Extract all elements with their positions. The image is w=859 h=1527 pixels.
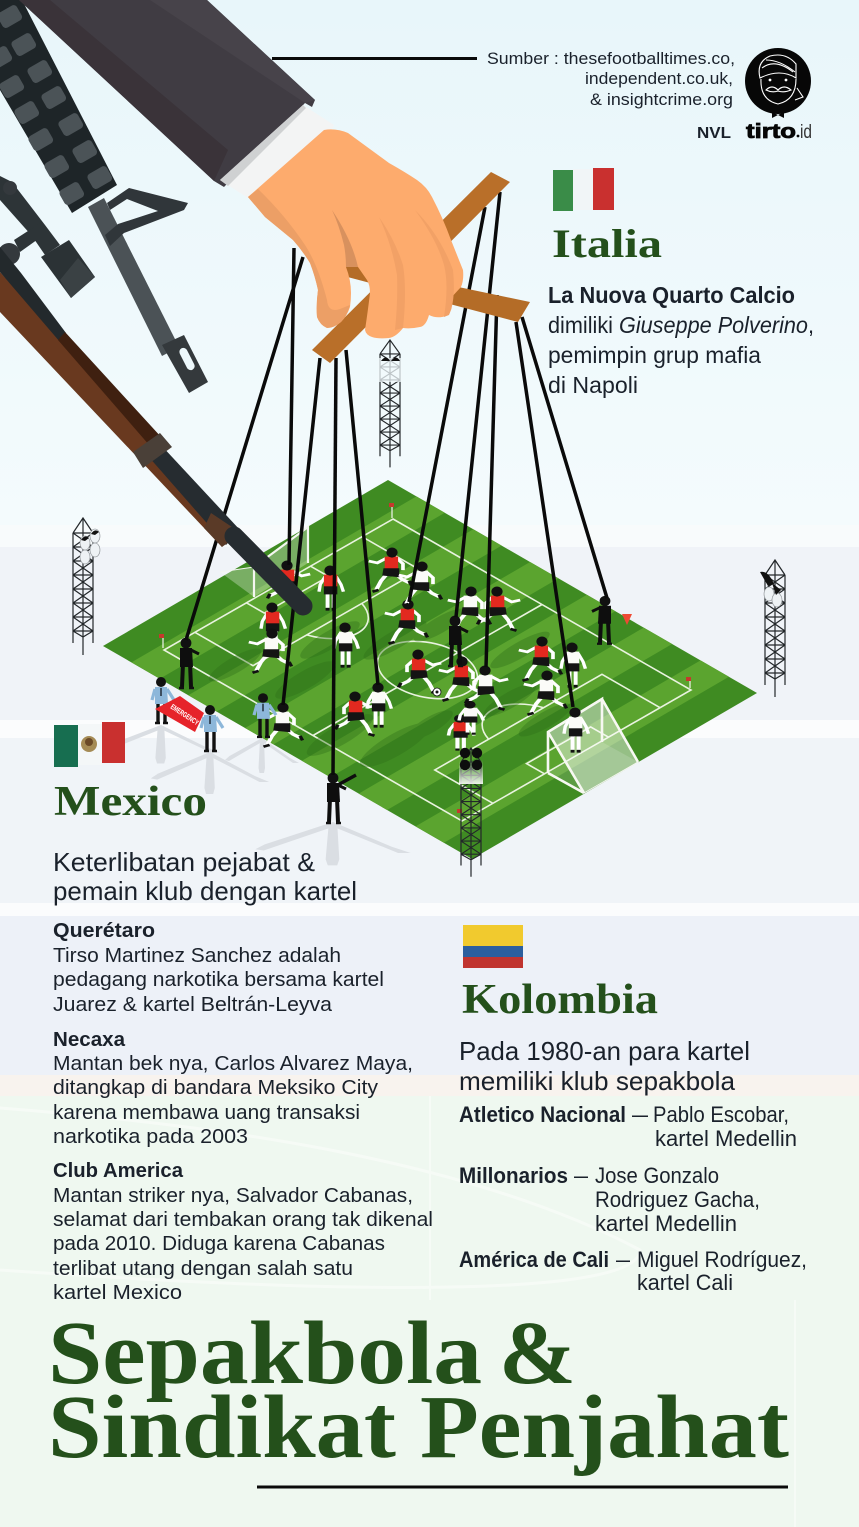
- sideline figure shadows: [102, 725, 411, 865]
- text: Necaxa: [53, 1028, 413, 1148]
- source credits: & insightcrime.org: [590, 91, 733, 109]
- text: Millonarios: kartel Medellin: [595, 1211, 737, 1236]
- text: Millonarios: Millonarios: [459, 1163, 568, 1188]
- text: Club America: Mantan striker nya, Salvador Cabanas,: [53, 1184, 413, 1207]
- stadium light towers: [73, 340, 785, 697]
- title: Sepakbola: [48, 1304, 482, 1403]
- subheading: Mexico: Keterlibatan pejabat &: [53, 847, 315, 877]
- text: Millonarios: —: [574, 1163, 588, 1188]
- heading: Kolombia: Kolombia: [462, 977, 658, 1023]
- flag: Mexico: [54, 722, 125, 767]
- tower: left: [73, 518, 100, 655]
- logo: tirto mascot: [745, 48, 811, 118]
- flag: Italia: [553, 168, 614, 211]
- black-suited referees and officials: [179, 596, 612, 823]
- subheading: Kolombia: Pada 1980-an para kartel: [459, 1036, 750, 1066]
- text: Club America: pada 2010. Diduga karena Cabanas: [53, 1232, 385, 1255]
- subheading: Kolombia: memiliki klub sepakbola: [459, 1066, 736, 1096]
- source rule: [272, 57, 477, 60]
- text: Millonarios: Jose Gonzalo: [595, 1163, 719, 1188]
- text: Querétaro: Tirso Martinez Sanchez adalah: [53, 944, 341, 967]
- lower goal: [548, 699, 638, 793]
- medics with stretcher: [152, 677, 276, 751]
- puppet control bars: [312, 172, 530, 363]
- text: Club America: Club America: [53, 1159, 184, 1182]
- text: Club America: selamat dari tembakan orang tak dikenal: [53, 1208, 433, 1231]
- heading: Mexico: Mexico: [54, 779, 207, 825]
- text: Millonarios: Rodriguez Gacha,: [595, 1187, 760, 1212]
- front light tower: [459, 748, 483, 877]
- text: América de Cali: América de Cali: [459, 1247, 609, 1272]
- text: Necaxa: narkotika pada 2003: [53, 1125, 248, 1148]
- text: Querétaro: Juarez & kartel Beltrán-Leyva: [53, 993, 333, 1016]
- pitch stripes: [103, 480, 757, 859]
- pitch markings: [164, 519, 691, 821]
- heading: Italia: Italia: [552, 221, 662, 266]
- text: Querétaro: [53, 919, 384, 1016]
- tower: right: [760, 560, 785, 697]
- puppet strings: [186, 192, 607, 775]
- flag: Kolombia: [463, 925, 523, 968]
- text: Club America: [53, 1159, 433, 1304]
- subheading: Kolombia: [459, 1036, 750, 1096]
- text: Atletico Nacional: [459, 1102, 797, 1151]
- hand: [248, 129, 463, 338]
- text: América de Cali: —: [616, 1247, 630, 1272]
- white team: [249, 562, 588, 753]
- text: Club America: kartel Mexico: [53, 1281, 182, 1304]
- shirt cuff: [220, 105, 334, 198]
- text: Querétaro: pedagang narkotika bersama kartel: [53, 968, 384, 991]
- player shadows on pitch: [205, 603, 575, 775]
- source credits: Sumber : thesefootballtimes.co,: [487, 50, 735, 68]
- text: Italia: [548, 282, 814, 398]
- players: [152, 548, 632, 823]
- text: Querétaro: Querétaro: [53, 919, 155, 942]
- logo: tirto.id wordmark: id: [800, 122, 812, 143]
- logo: tirto.id wordmark: tirto: [746, 121, 796, 143]
- text: Italia: La Nuova Quarto Calcio: [548, 282, 795, 308]
- subheading: Mexico: [53, 847, 357, 906]
- text: Atletico Nacional: —: [632, 1102, 648, 1127]
- corner flag runner marker: [622, 614, 632, 625]
- ball: [433, 688, 441, 696]
- text: Necaxa: ditangkap di bandara Meksiko City: [53, 1076, 379, 1099]
- medics with stretcher: EMERGENCY: [169, 702, 201, 727]
- source credits: independent.co.uk,: [585, 70, 733, 88]
- weapon: wooden rifle: [0, 247, 303, 606]
- subheading: Mexico: pemain klub dengan kartel: [53, 876, 357, 906]
- text: Atletico Nacional: Atletico Nacional: [459, 1102, 626, 1127]
- text: Atletico Nacional: Pablo Escobar,: [653, 1102, 789, 1127]
- upper goal: [220, 527, 308, 597]
- football pitch: [103, 480, 757, 859]
- text: Italia: di Napoli: [548, 372, 638, 398]
- text: Italia: dimiliki Giuseppe Polverino,: [548, 312, 814, 338]
- text: Necaxa: karena membawa uang transaksi: [53, 1101, 360, 1124]
- text: Italia: pemimpin grup mafia: [548, 342, 761, 368]
- text: América de Cali: kartel Cali: [637, 1270, 733, 1295]
- title underline: [257, 1486, 788, 1488]
- text: Club America: terlibat utang dengan salah satu: [53, 1257, 353, 1280]
- tower: top: [378, 340, 402, 467]
- text: Millonarios: [459, 1163, 760, 1236]
- text: América de Cali: Miguel Rodríguez,: [637, 1247, 807, 1272]
- weapon: scoped barrel: [0, 176, 95, 298]
- text: Necaxa: Mantan bek nya, Carlos Alvarez Maya,: [53, 1052, 413, 1075]
- jacket sleeve: [19, 0, 315, 187]
- title: [48, 1304, 789, 1477]
- text: Necaxa: Necaxa: [53, 1028, 126, 1051]
- credit: author initials: NVL: [697, 125, 731, 142]
- red team: [261, 548, 562, 751]
- weapon: assault rifle: [0, 0, 208, 393]
- text: Atletico Nacional: kartel Medellin: [655, 1126, 797, 1151]
- title: Sindikat Penjahat: [48, 1378, 789, 1477]
- corner flags: [159, 503, 691, 813]
- source credits: [487, 50, 735, 109]
- puppeteer arm: [19, 0, 334, 198]
- logo: tirto.id wordmark: [746, 121, 812, 143]
- title: &: [499, 1304, 576, 1403]
- text: América de Cali: [459, 1247, 807, 1295]
